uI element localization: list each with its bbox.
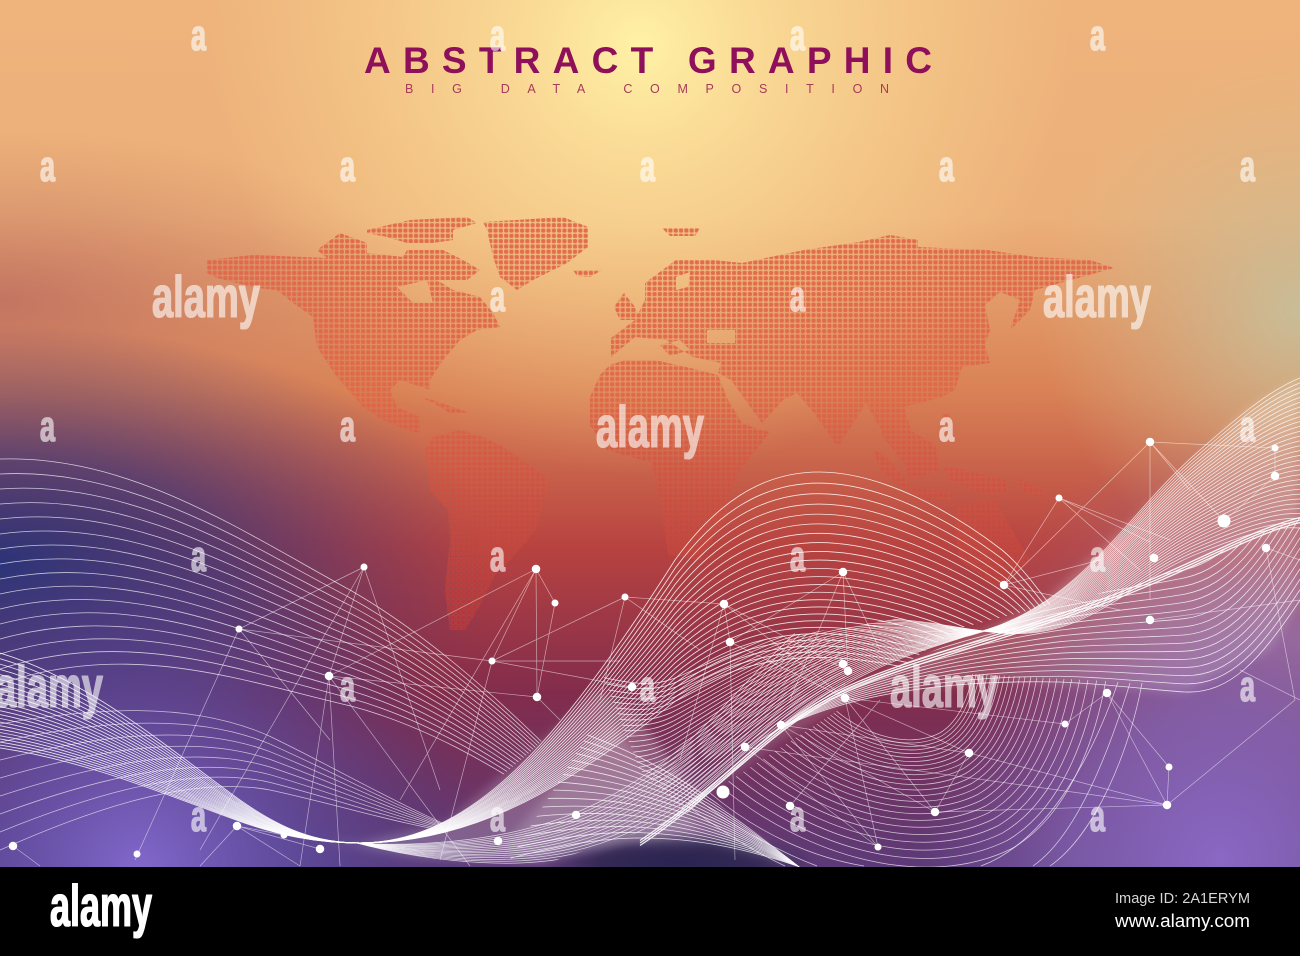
watermark tiles: a xyxy=(790,11,805,60)
watermark tiles: a xyxy=(790,272,805,321)
watermark tiles: a xyxy=(1090,11,1105,60)
watermark tiles: a xyxy=(191,11,206,60)
watermark logos xyxy=(0,265,1151,720)
watermark tiles: a xyxy=(1240,142,1255,191)
watermark tiles: a xyxy=(1240,662,1255,711)
website: www.alamy.com xyxy=(1114,911,1250,931)
watermark tiles: a xyxy=(490,11,505,60)
watermark tiles: a xyxy=(191,792,206,841)
watermark tiles: a xyxy=(340,662,355,711)
watermark tiles: a xyxy=(340,402,355,451)
subtitle: BIG DATA COMPOSITION xyxy=(405,82,889,96)
watermark tiles: a xyxy=(640,142,655,191)
watermark tiles: a xyxy=(1240,402,1255,451)
watermark tiles: a xyxy=(790,532,805,581)
watermark tiles: a xyxy=(939,142,954,191)
watermark logos: alamy xyxy=(1043,265,1151,330)
wave: lower right bowl lines xyxy=(721,674,1106,867)
watermark tiles: a xyxy=(40,402,55,451)
watermark tiles: a xyxy=(640,662,655,711)
watermark tiles: a xyxy=(340,142,355,191)
watermark tiles: a xyxy=(490,532,505,581)
wave: right fold lines xyxy=(760,518,1300,740)
wave: rising mesh under the left band xyxy=(358,634,845,864)
wave: outer bowl lines leaving the bottom edge xyxy=(689,682,1142,866)
watermark tiles: a xyxy=(1090,532,1105,581)
watermark tiles: a xyxy=(1090,792,1105,841)
network nodes xyxy=(13,442,1275,854)
title: ABSTRACT GRAPHIC xyxy=(364,40,932,81)
footer logo: alamy xyxy=(50,874,152,939)
wave: lower descending mesh xyxy=(510,734,800,867)
wave: upper right rising band xyxy=(604,378,1300,814)
watermark tiles: a xyxy=(191,532,206,581)
wave: large central arch xyxy=(0,472,1050,843)
footer bar xyxy=(0,867,1300,956)
wave: left descending lines xyxy=(0,458,542,774)
watermark tiles: a xyxy=(40,142,55,191)
wave: lower left rising lines xyxy=(0,710,442,850)
watermark tiles: a xyxy=(939,402,954,451)
watermark tiles: a xyxy=(790,792,805,841)
watermark tiles: a xyxy=(490,272,505,321)
network connection lines xyxy=(13,442,1300,866)
watermark logos: alamy xyxy=(152,265,260,330)
dotted world map xyxy=(207,217,1112,630)
watermark logos: alamy xyxy=(596,395,704,460)
wave: soft glow behind dense mesh xyxy=(320,380,1300,865)
wave: bright white ridge xyxy=(640,518,1300,846)
watermark logos: alamy xyxy=(890,655,998,720)
watermark tiles: a xyxy=(490,792,505,841)
image id: Image ID: 2A1ERYM xyxy=(1115,890,1250,907)
